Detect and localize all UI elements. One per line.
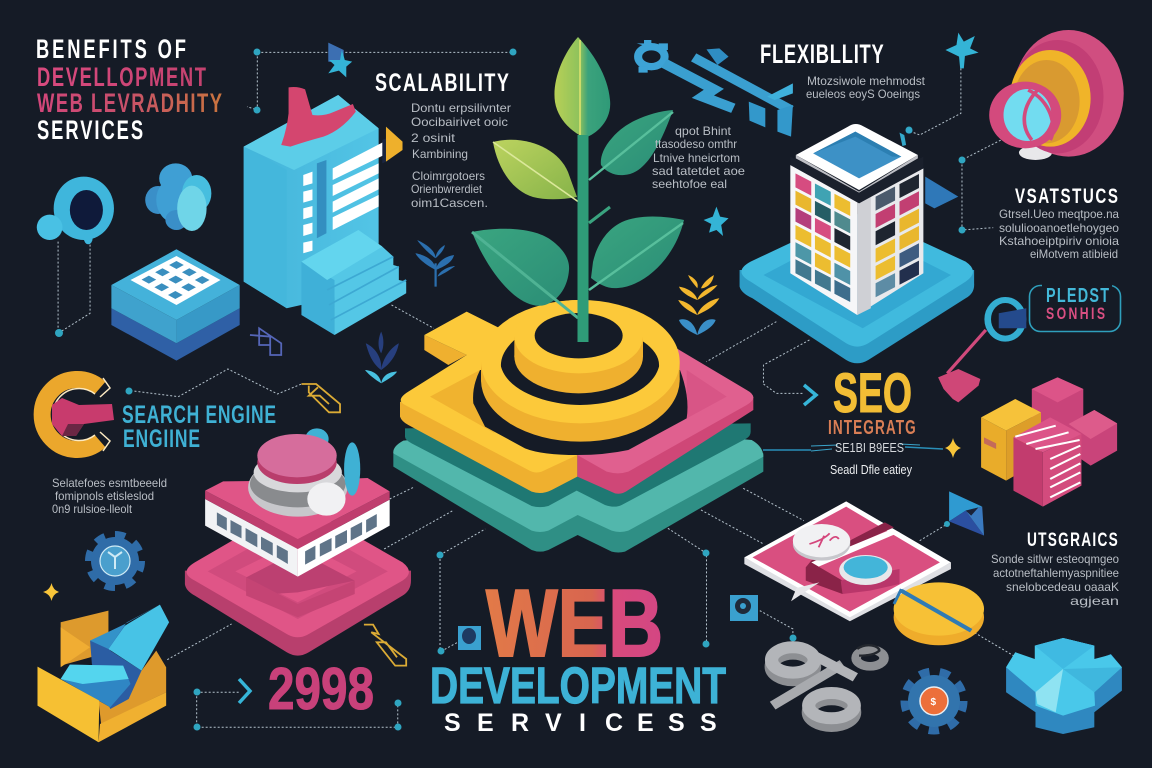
badge: pledst sonhis: SONHIS <box>1046 305 1105 324</box>
isometric keypad block <box>111 249 240 361</box>
title: SERVICES <box>37 114 143 145</box>
icon: scissors <box>772 645 884 726</box>
text: plant notes: sad tatetdet aoe <box>652 164 745 178</box>
text: SEO block: SE1BI B9EES <box>835 440 904 455</box>
text: scalability: Cloimrgotoers <box>412 169 485 183</box>
pink cap <box>281 87 356 147</box>
lower left leaf <box>472 229 569 306</box>
yellow tag <box>382 138 386 163</box>
window grid right <box>876 174 919 297</box>
icon: blue lumps <box>145 163 211 231</box>
icon: orange C magnet <box>42 378 114 451</box>
key 2 <box>694 48 793 137</box>
text: statistics: Gtrsel.Ueo meqtpoe.na <box>999 207 1119 221</box>
top leaf <box>554 37 610 138</box>
window grid left <box>795 173 850 302</box>
text: flexibility: FLEXIBLLITY <box>760 38 884 69</box>
yellow disc with blue pin <box>894 582 984 645</box>
title: BENEFITS OF <box>36 33 186 64</box>
text: flexibility: Mtozsiwole mehmodst <box>807 74 926 88</box>
icon: blue tile right <box>730 595 758 621</box>
text: search engine: SEARCH ENGINE <box>122 400 276 429</box>
concentric rings <box>481 300 680 442</box>
icon: blue gear <box>90 536 140 586</box>
small water valve <box>899 128 912 146</box>
big title: web: WEB <box>486 570 663 677</box>
layer: yellow platform <box>400 312 585 493</box>
white block <box>205 478 390 577</box>
icon: blue ring cluster <box>37 177 114 244</box>
text: plant notes: Ltnive hneicrtom <box>653 151 740 165</box>
text: plant notes: qpot Bhint <box>675 124 732 138</box>
lower right leaf <box>591 216 684 288</box>
blue flag <box>925 177 958 208</box>
icon: teal star with stem <box>945 33 979 68</box>
icon: pink handle <box>938 369 980 402</box>
text: statistics: soluliooanoetlehoygeo <box>999 221 1119 235</box>
chevron arrow: 2998 <box>239 679 250 703</box>
text: scalability: Kambining <box>412 147 468 161</box>
title <box>36 33 222 145</box>
text: scalability: SCALABILITY <box>375 68 509 97</box>
text: search engine: ENGIINE <box>123 424 200 453</box>
text: scalability: Orienbwrerdiet <box>411 182 483 196</box>
icon: orange centre gear <box>906 673 962 729</box>
text: flexibility: eueleos eoyS Ooeings <box>806 87 920 101</box>
stacked cylinders <box>248 428 360 517</box>
pink server platform <box>185 428 411 656</box>
decor: zigzag lattices <box>250 328 406 666</box>
icon: open box with crystals <box>37 605 169 742</box>
icon: blue cross wheel <box>1006 638 1122 734</box>
platform <box>740 214 974 363</box>
text: utsgraics: agjean <box>1070 594 1119 608</box>
big title: services: SERVICESS <box>444 709 717 737</box>
text: scalability: Dontu erpsilivnter <box>411 101 511 115</box>
text: plant notes: ttasodeso omthr <box>655 137 737 151</box>
icon: blue tile left <box>458 626 481 650</box>
number: 2998: 2998 <box>268 656 374 722</box>
icon: star with flag <box>328 43 352 77</box>
text: utsgraics: actotneftahlemyaspnitiee <box>993 566 1119 580</box>
white disc <box>793 527 850 561</box>
icon: navy sprig <box>365 332 399 383</box>
key 1 <box>637 40 733 108</box>
teal disc <box>839 555 892 585</box>
icon: blue sprig <box>415 240 455 287</box>
text: statistics <box>999 183 1119 261</box>
tower faces <box>790 124 923 315</box>
text: scalability: Oocibairivet ooic <box>411 115 508 129</box>
text: plant notes <box>652 124 745 191</box>
icon: blue kite <box>949 491 984 536</box>
big title: development: DEVELOPMENT <box>430 657 726 714</box>
icon: pink disc with lens <box>989 30 1124 160</box>
text: utsgraics: Sonde sitlwr esteoqmgeo <box>991 552 1119 566</box>
connector lines <box>55 48 1013 730</box>
building body <box>244 95 382 308</box>
yellow box <box>981 399 1041 481</box>
keys <box>637 40 793 137</box>
badge: pledst sonhis: PLEDST <box>1046 284 1109 307</box>
layer: teal base <box>393 423 763 552</box>
upper left leaf <box>493 140 577 199</box>
text: SEO block <box>828 361 916 477</box>
icon: orange centre gear: $ <box>930 697 936 708</box>
text: scalability <box>375 68 511 210</box>
pink back cubes <box>1032 377 1117 466</box>
text: flexibility <box>760 38 926 101</box>
icon: blue ring with rod <box>947 300 1026 373</box>
pink cubes <box>981 377 1117 507</box>
layer: pink platform <box>577 348 753 494</box>
text: SEO block: INTEGRATG <box>828 416 916 439</box>
text: statistics: Kstahoeiptpiriv onioia <box>999 234 1119 248</box>
icon: golden sprig <box>678 275 719 335</box>
text: utsgraics: UTSGRAICS <box>1027 529 1118 551</box>
dark recess <box>473 370 687 455</box>
text: scalability: oim1Cascen. <box>411 196 488 210</box>
office tower on platform <box>740 124 974 363</box>
pointer <box>791 582 819 601</box>
text: utsgraics: snelobcedeau oaaaK <box>1006 580 1119 594</box>
text: SEO block: SEO <box>833 361 912 424</box>
icon: small teal star <box>704 207 729 236</box>
isometric card <box>744 501 951 621</box>
chevron arrow: SEO <box>804 385 816 405</box>
icon: yellow sparkle SEO <box>945 438 961 458</box>
text: utsgraics <box>991 529 1119 608</box>
plant <box>472 37 684 342</box>
text: search engine <box>52 400 276 516</box>
text: plant notes: seehtofoe eal <box>652 177 727 191</box>
striped block <box>1013 417 1081 507</box>
text: search engine: Selatefoes esmtbeeeld <box>52 476 167 490</box>
central stack of isometric layers <box>393 300 763 552</box>
building with stairs <box>244 87 406 335</box>
stem and veins <box>472 40 683 342</box>
icon: yellow sparkle <box>43 583 59 601</box>
text: SEO block: Seadl Dfle eatiey <box>830 462 912 477</box>
title: WEB LEVRADHITY <box>37 87 222 118</box>
text: statistics: eiMotvem atibieid <box>1030 247 1118 261</box>
badge: pledst sonhis <box>1030 283 1120 332</box>
title: DEVELLOPMENT <box>37 61 206 92</box>
upper right leaf <box>601 110 673 175</box>
text: search engine: fomipnols etisleslod <box>55 489 154 503</box>
text: search engine: 0n9 rulsioe-lleolt <box>52 502 133 516</box>
base <box>185 506 411 656</box>
windows <box>303 142 384 253</box>
stairs <box>301 230 406 335</box>
text: statistics: VSATSTUCS <box>1015 183 1118 208</box>
text: scalability: 2 osinit <box>411 131 456 145</box>
